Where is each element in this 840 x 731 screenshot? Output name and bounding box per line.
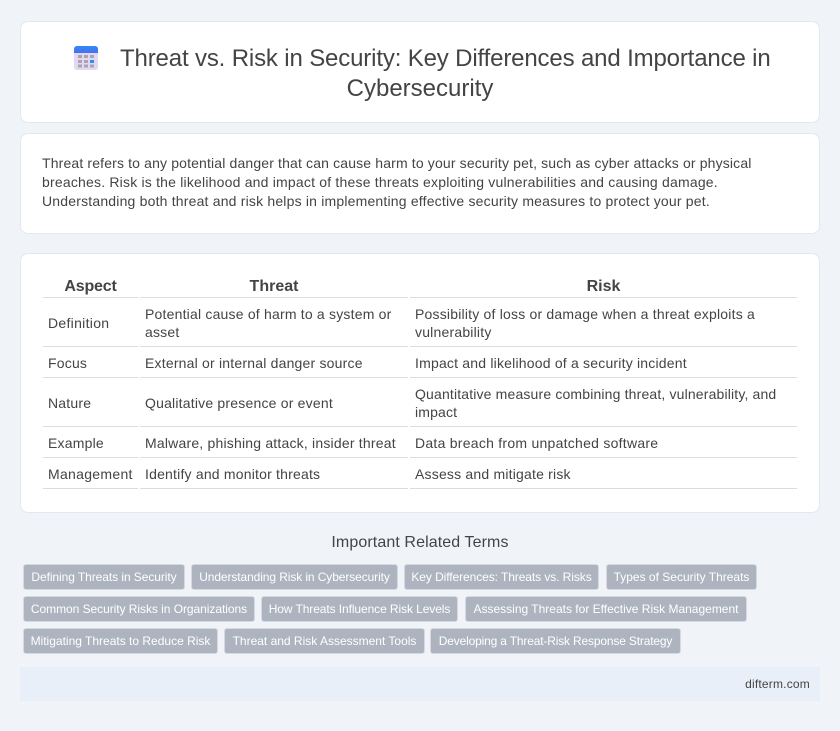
row: management: Management (48, 466, 133, 482)
related term tags (23, 564, 757, 654)
intro card (20, 133, 820, 234)
table header: Threat (250, 278, 298, 295)
row: definition: Possibility of loss or damage when a threat exploits a (415, 306, 755, 322)
row: focus: Focus (48, 355, 87, 371)
intro text (42, 155, 752, 209)
tag: Key Differences: Threats vs. Risks (411, 570, 592, 584)
row: definition: asset (145, 324, 179, 340)
row: management: Assess and mitigate risk (415, 466, 571, 482)
tag: Assessing Threats for Effective Risk Management (473, 602, 738, 616)
row: definition: Potential cause of harm to a system or (145, 306, 392, 322)
row: focus: Impact and likelihood of a security incident (415, 355, 687, 371)
row: management (48, 466, 571, 482)
tag: Common Security Risks in Organizations (31, 602, 247, 616)
intro text: Threat refers to any potential danger that can cause harm to your security pet, such as cyber attacks or physical (42, 155, 752, 171)
row: example: Malware, phishing attack, insider threat (145, 435, 396, 451)
row: focus (48, 355, 687, 371)
tag: How Threats Influence Risk Levels (269, 602, 450, 616)
header card: Threat vs. Risk in Security: Key Differences and Importance in (120, 45, 771, 72)
table header: Aspect (64, 278, 117, 295)
tag (23, 564, 185, 590)
row: nature: impact (415, 404, 457, 420)
row: nature (48, 386, 776, 420)
row: definition: Definition (48, 315, 109, 331)
table header: Risk (587, 278, 620, 295)
tag (606, 564, 757, 590)
row: nature: Nature (48, 395, 91, 411)
footer text: difterm.com (745, 677, 810, 691)
tag (404, 564, 599, 590)
tag (224, 628, 425, 654)
comparison table (43, 278, 797, 489)
tag (465, 596, 747, 622)
title (120, 45, 771, 102)
icon: calendar (74, 46, 98, 70)
tag: Understanding Risk in Cybersecurity (199, 570, 390, 584)
tag (191, 564, 398, 590)
tag: Types of Security Threats (614, 570, 749, 584)
row: nature: Qualitative presence or event (145, 395, 333, 411)
row: example (48, 435, 658, 451)
tag (23, 596, 255, 622)
tag (23, 628, 218, 654)
intro text: breaches. Risk is the likelihood and impact of these threats exploiting vulnerabilities and causing damage. (42, 174, 718, 190)
table card (20, 253, 820, 513)
row: example: Example (48, 435, 104, 451)
tag (430, 628, 681, 654)
related terms heading: Important Related Terms (331, 534, 509, 551)
header card: Cybersecurity (347, 75, 493, 102)
row: nature: Quantitative measure combining threat, vulnerability, and (415, 386, 776, 402)
row: definition (48, 306, 755, 340)
footer bar (20, 667, 820, 701)
header card (20, 21, 820, 123)
tag: Defining Threats in Security (31, 570, 177, 584)
row: example: Data breach from unpatched software (415, 435, 658, 451)
row: focus: External or internal danger source (145, 355, 363, 371)
intro text: Understanding both threat and risk helps in implementing effective security measures to protect your pet. (42, 193, 710, 209)
table header (64, 278, 620, 295)
tag: Mitigating Threats to Reduce Risk (31, 634, 210, 648)
row: definition: vulnerability (415, 324, 492, 340)
tag: Threat and Risk Assessment Tools (233, 634, 416, 648)
tag: Developing a Threat-Risk Response Strategy (439, 634, 672, 648)
tag (261, 596, 458, 622)
row: management: Identify and monitor threats (145, 466, 320, 482)
